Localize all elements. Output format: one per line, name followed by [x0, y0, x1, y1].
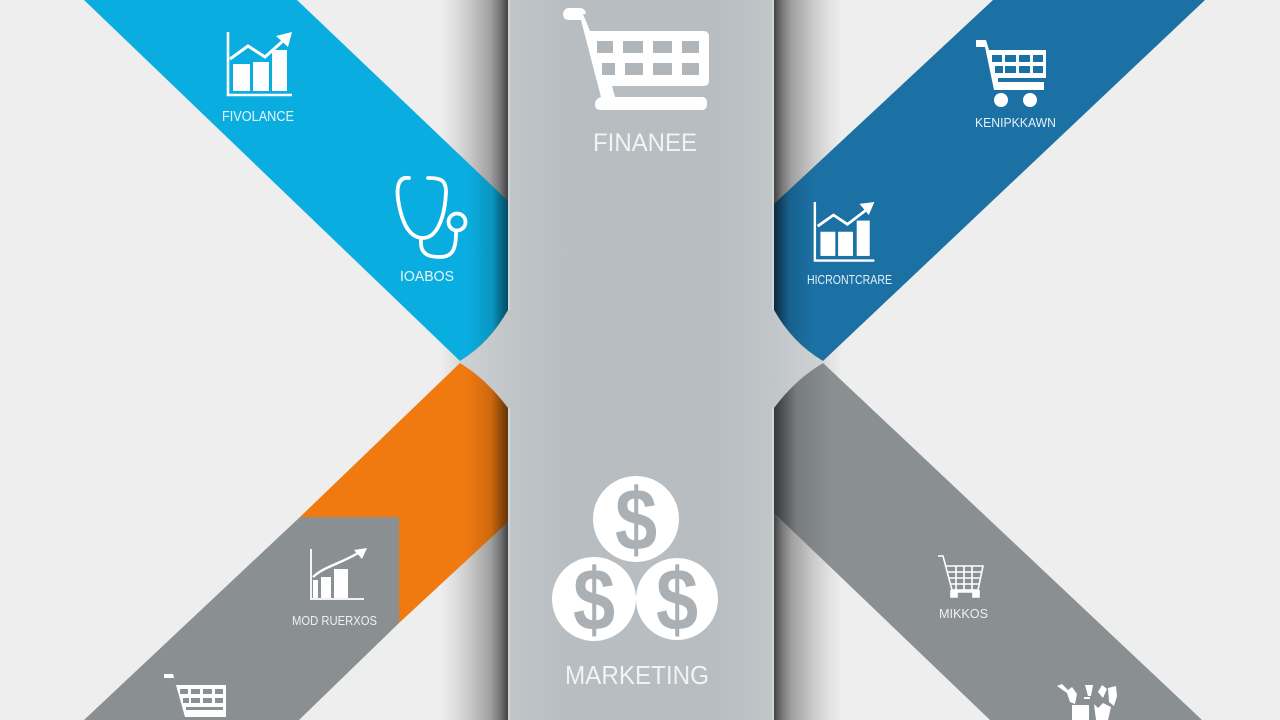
icon: rising chart: [311, 548, 367, 599]
icon: stacked dollar coins: $: [573, 552, 615, 649]
panel: top-right dark blue ribbon: [774, 0, 1205, 370]
heading: marketing: MARKETING: [565, 660, 709, 690]
panel: top-left blue ribbon: [84, 0, 508, 370]
label: ribbon item 2: IOABOS: [400, 268, 454, 285]
icon: growth chart: [228, 32, 292, 95]
icon: fragmented cart: [1057, 684, 1117, 720]
icon: stethoscope: [398, 178, 466, 257]
icon: growth chart: [815, 202, 874, 261]
icon: shopping cart: [976, 40, 1048, 107]
central panel shadow right: [774, 0, 842, 720]
icon: large shopping cart: [563, 8, 709, 110]
central panel shadow left: [440, 0, 508, 720]
label: ribbon item 4: HICRONTCRARE: [807, 272, 892, 287]
panel: central column: [461, 0, 822, 720]
panel: bottom-left gray ribbon: [84, 517, 399, 720]
icon: shopping cart: [164, 674, 226, 717]
heading: finance: FINANEE: [593, 129, 697, 157]
label: ribbon item 3: KENIPKKAWN: [975, 115, 1056, 130]
icon: shopping cart: [938, 556, 983, 597]
label: ribbon item 6: MIKKOS: [939, 606, 988, 621]
panel: bottom-left orange ribbon: [300, 355, 508, 623]
label: ribbon item 5: MOD RUERXOS: [292, 613, 377, 628]
icon: stacked dollar coins: $: [656, 552, 698, 649]
icon: stacked dollar coins: $: [615, 472, 657, 569]
icon: stacked dollar coins: [552, 472, 718, 649]
panel: bottom-right gray ribbon: [774, 355, 1202, 720]
label: ribbon item 1: FIVOLANCE: [222, 108, 294, 125]
